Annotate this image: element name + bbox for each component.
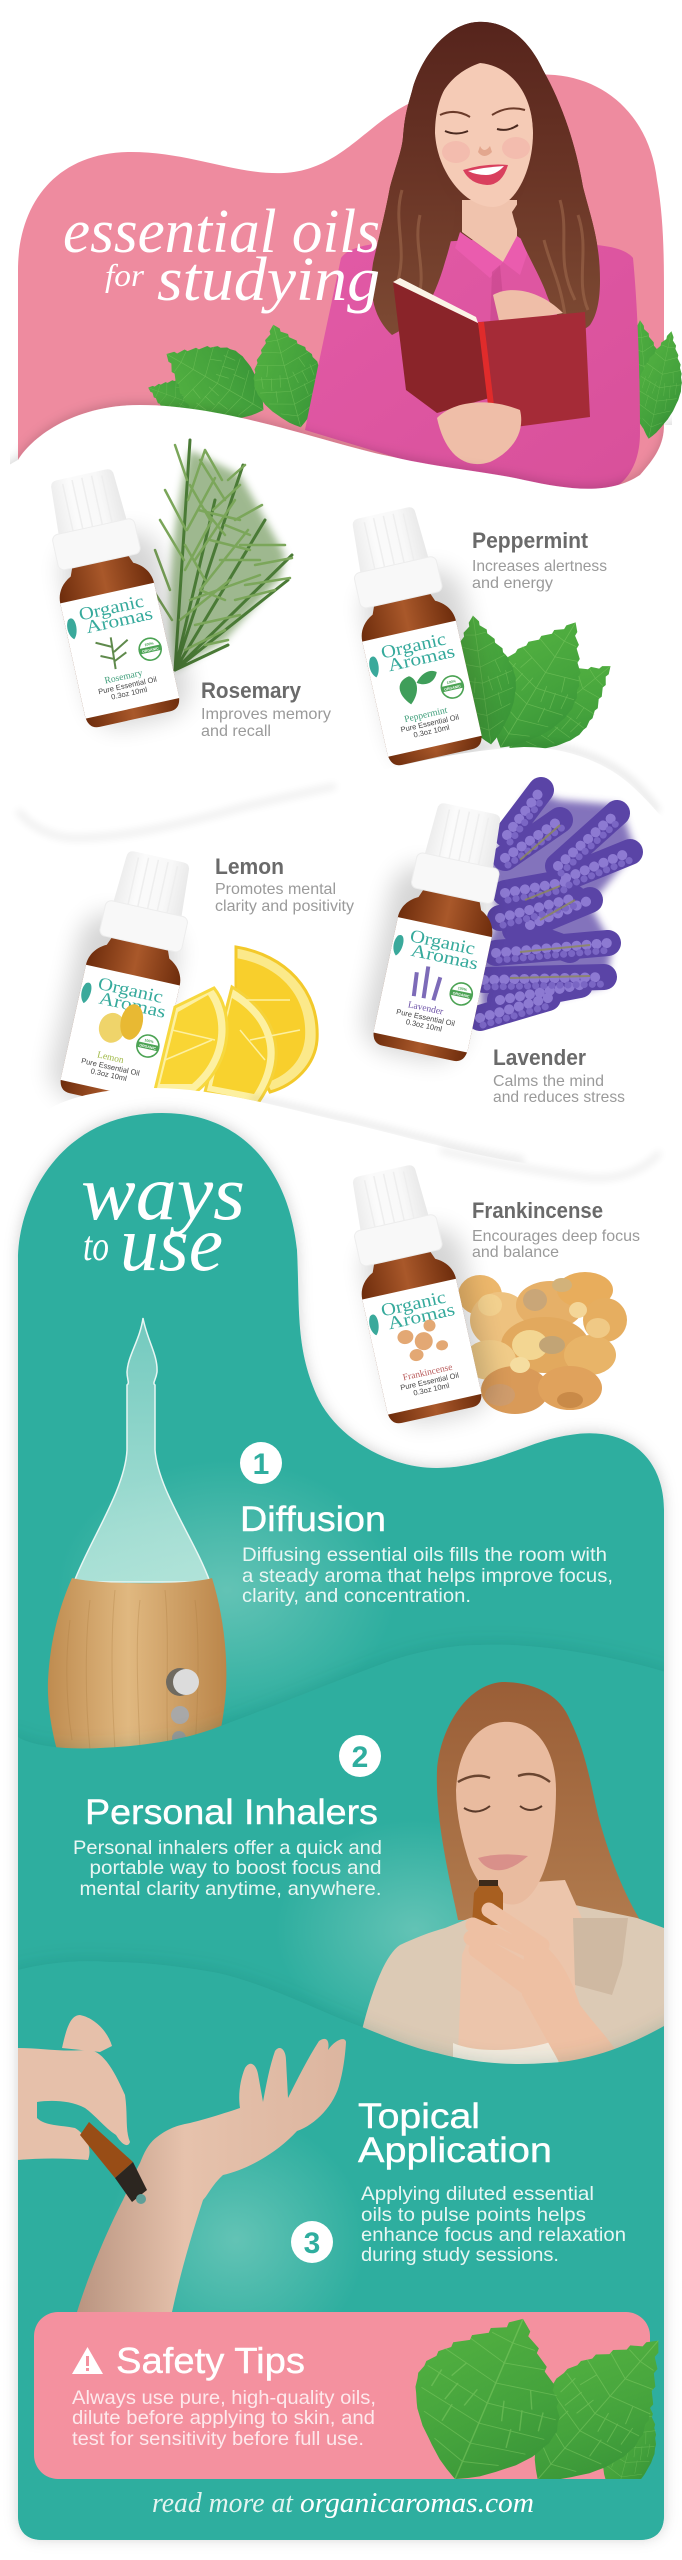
- text: lemon: clarity and positivity: [215, 898, 354, 915]
- step 2: personal inhalers: Personal inhalers offer a quick and: [73, 1837, 382, 1859]
- title: essential oils for studying: studying: [157, 246, 380, 314]
- bottle: peppermint: Aromas: [386, 641, 457, 675]
- step 3: topical application: enhance focus and relaxation: [361, 2224, 626, 2246]
- wave: topical section: [18, 1975, 664, 2540]
- text: rosemary: Improves memory: [201, 706, 331, 723]
- bottle: lemon: ORGANIC: [139, 1043, 157, 1051]
- bottle: peppermint: 100%: [446, 679, 457, 685]
- text: frankincense: Frankincense: [472, 1198, 603, 1223]
- footer: read more: [152, 2487, 534, 2519]
- badge: number 3: 3: [304, 2227, 320, 2260]
- bottle: rosemary: Pure Essential Oil: [97, 675, 158, 696]
- text: lavender: and reduces stress: [493, 1089, 625, 1106]
- bottle: rosemary: 100%: [144, 641, 155, 647]
- wave shadow: right lip under section two: [440, 1150, 660, 1178]
- panel: safety tips: test for sensitivity before full use.: [72, 2428, 364, 2450]
- heading: ways to use: ways: [81, 1149, 245, 1236]
- text: rosemary: [201, 678, 331, 740]
- step 3: topical application: during study sessions.: [361, 2244, 559, 2266]
- bottle: rosemary: Organic: [77, 591, 146, 624]
- bottle: rosemary: 0.3oz 10ml: [110, 685, 148, 702]
- panel: white oils section two: [0, 747, 682, 1200]
- step 1: diffusion: Diffusion: [240, 1500, 386, 1539]
- illustration: woman smelling a bottle: [362, 1682, 664, 2075]
- bottle: lavender: Aromas: [409, 940, 480, 974]
- step 3: topical application: Topical: [358, 2097, 480, 2136]
- badge: number 1: [240, 1442, 282, 1484]
- bottle: lemon: 100%: [144, 1038, 155, 1044]
- bottle: peppermint: ORGANIC: [444, 684, 462, 692]
- bottle: frankincense: Pure Essential Oil: [400, 1370, 460, 1392]
- footer: read more: read more at: [152, 2487, 294, 2519]
- bottle: lavender: Lavender: [407, 1000, 445, 1018]
- heading: ways to use: [81, 1149, 245, 1287]
- badge: number 3: [291, 2221, 333, 2263]
- bottle: peppermint: Pure Essential Oil: [400, 712, 460, 734]
- illustration: frankincense resin: [458, 1272, 627, 1414]
- text: rosemary: Rosemary: [201, 678, 302, 703]
- wave shadow: left lip under section one: [18, 786, 336, 838]
- panel: safety tips: dilute before applying to skin, and: [72, 2407, 375, 2429]
- step 1: diffusion: Diffusing essential oils fills the room with: [242, 1544, 607, 1566]
- heading: ways to use: use: [120, 1200, 223, 1287]
- text: peppermint: [472, 528, 607, 592]
- bottle: lavender: 100%: [457, 986, 468, 992]
- panel: teal ways to use: [18, 1113, 664, 2540]
- wave group: teal shading and figures: [0, 1318, 682, 2560]
- bottle: frankincense: Frankincense: [402, 1363, 454, 1383]
- badge: number 2: 2: [352, 1741, 368, 1774]
- bottle: lavender: 0.3oz 10ml: [405, 1017, 443, 1034]
- step 2: personal inhalers: [73, 1735, 382, 1900]
- footer: read more: organicaromas.com: [300, 2487, 534, 2519]
- text: lemon: [215, 854, 354, 915]
- illustration: hands applying roller oil: [18, 2015, 346, 2312]
- text: lavender: [493, 1045, 625, 1106]
- panel: white oils section three: [0, 1088, 682, 1560]
- bottle: lavender: ORGANIC: [452, 991, 470, 999]
- bottle: lemon: Organic: [96, 973, 165, 1007]
- text: lavender: Calms the mind: [493, 1073, 604, 1090]
- bottle: lemon: Lemon: [96, 1050, 125, 1066]
- bottle: frankincense: [336, 1158, 497, 1430]
- text: frankincense: Encourages deep focus: [472, 1228, 640, 1245]
- step 3: topical application: [291, 2097, 626, 2266]
- bottle: rosemary: Aromas: [84, 603, 155, 637]
- bottle: lemon: [45, 844, 206, 1116]
- illustration: woman reading a red book: [305, 22, 640, 495]
- bottle: lavender: Organic: [408, 925, 477, 959]
- step 2: personal inhalers: Personal Inhalers: [85, 1793, 378, 1832]
- bottle: lemon: Aromas: [97, 988, 168, 1022]
- badge: number 2: [339, 1735, 381, 1777]
- icon: hero mint leaves: [141, 316, 682, 443]
- text: lemon: Promotes mental: [215, 881, 336, 898]
- panel: safety tips: [34, 2312, 658, 2479]
- illustration: lavender sprigs: [480, 790, 635, 1025]
- bottle: rosemary: ORGANIC: [142, 646, 160, 654]
- bottle: frankincense: 0.3oz 10ml: [412, 1381, 451, 1398]
- step 1: diffusion: clarity, and concentration.: [242, 1585, 471, 1607]
- text: frankincense: and balance: [472, 1244, 559, 1261]
- step 3: topical application: oils to pulse points helps: [361, 2204, 586, 2226]
- title: essential oils for studying: [63, 198, 380, 314]
- step 3: topical application: Applying diluted essential: [361, 2183, 594, 2205]
- text: lemon: Lemon: [215, 854, 284, 879]
- bottle: rosemary: Rosemary: [104, 668, 144, 687]
- bottle: peppermint: Organic: [379, 629, 448, 662]
- heading: ways to use: to: [83, 1224, 109, 1270]
- bottle: frankincense: Aromas: [386, 1299, 457, 1333]
- text: lavender: Lavender: [493, 1045, 586, 1070]
- badge: number 1: 1: [253, 1448, 269, 1481]
- panel: safety tips: Safety Tips: [116, 2340, 305, 2381]
- bottle: peppermint: Peppermint: [403, 706, 449, 725]
- title: essential oils for studying: essential oils: [63, 198, 380, 266]
- icon: safety mint leaves: [416, 2318, 658, 2479]
- bottle: lavender: Pure Essential Oil: [396, 1007, 456, 1028]
- step 2: personal inhalers: portable way to boost focus and: [90, 1857, 382, 1879]
- step 1: diffusion: [240, 1442, 613, 1607]
- step 2: personal inhalers: mental clarity anytime, anywhere.: [80, 1878, 381, 1900]
- bottle: frankincense: Organic: [379, 1287, 448, 1320]
- illustration: diffuser: [48, 1318, 226, 1760]
- step 3: topical application: Application: [358, 2131, 552, 2170]
- text: peppermint: Peppermint: [472, 528, 589, 553]
- text: peppermint: and energy: [472, 575, 553, 592]
- illustration: lemon slices: [155, 947, 317, 1103]
- bottle: peppermint: 0.3oz 10ml: [413, 723, 451, 740]
- icon: warning triangle: [72, 2347, 103, 2374]
- panel: white oils section one: [10, 398, 672, 495]
- illustration: rosemary sprig: [150, 440, 292, 670]
- bottle: rosemary: [34, 462, 195, 734]
- wave: inhaler section: [54, 1693, 306, 1760]
- text: frankincense: [472, 1198, 640, 1261]
- step 1: diffusion: a steady aroma that helps improve focus,: [242, 1565, 613, 1587]
- bottle: lemon: Pure Essential Oil: [80, 1056, 141, 1078]
- bottle: lavender: [358, 796, 517, 1068]
- text: rosemary: and recall: [201, 723, 271, 740]
- text: peppermint: Increases alertness: [472, 558, 607, 575]
- panel: hero pink blob: [18, 74, 664, 491]
- panel: safety tips: Always use pure, high-quality oils,: [72, 2387, 376, 2409]
- illustration: peppermint leaves: [439, 601, 632, 774]
- bottle: lemon: 0.3oz 10ml: [90, 1066, 128, 1083]
- bottle: peppermint: [336, 500, 497, 772]
- title: essential oils for studying: for: [105, 257, 145, 293]
